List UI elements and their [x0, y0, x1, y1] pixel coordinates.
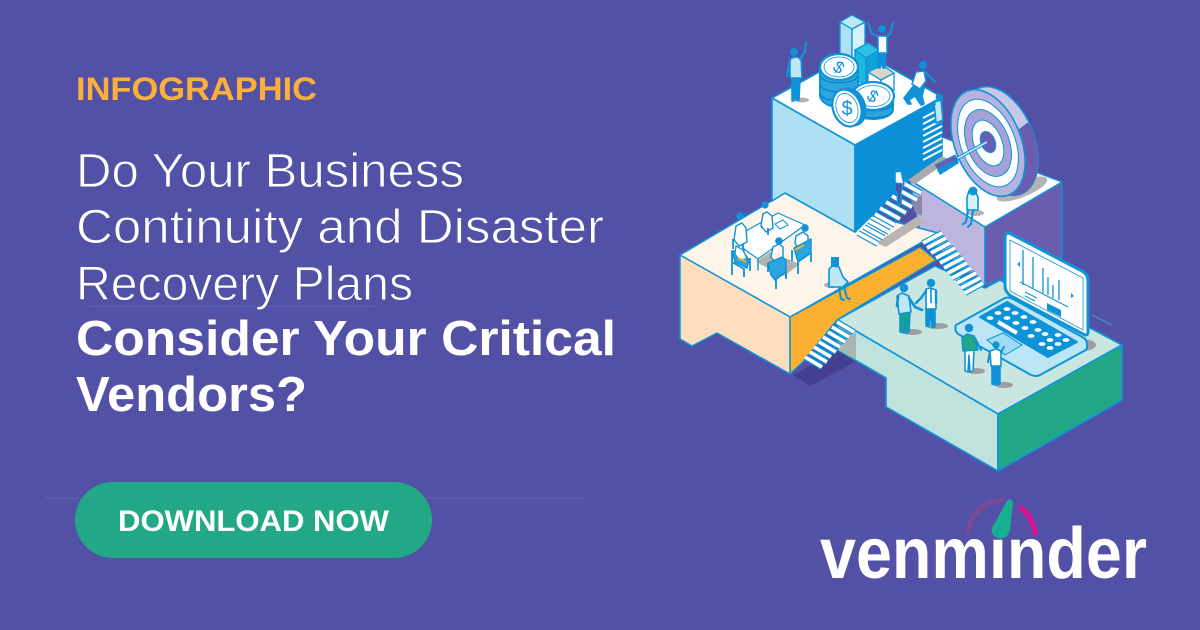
back person [761, 212, 773, 232]
person: cheering on pedestal [868, 23, 893, 68]
button: download now [75, 482, 432, 558]
block: purple [910, 137, 1062, 285]
laptop chart [1017, 250, 1074, 317]
stairs: orange to floor [805, 322, 854, 367]
block: blue cube [772, 50, 942, 232]
shadow under lower stairs [793, 350, 857, 386]
laptop screen [1005, 233, 1088, 335]
button: download now: DOWNLOAD NOW [118, 505, 390, 538]
heading: Continuity and Disaster [76, 201, 604, 254]
heading: Vendors? [76, 368, 307, 422]
label: INFOGRAPHIC: INFOGRAPHIC [76, 71, 317, 107]
front left person in chair [732, 251, 749, 268]
icon: coin stacks: $ [863, 86, 882, 107]
person: walking on stairs [889, 164, 908, 205]
icon: meeting table with people [732, 201, 811, 289]
block: cream [680, 193, 938, 374]
left person [734, 223, 747, 246]
icon: target with arrow [934, 86, 1048, 202]
heading: Recovery Plans [76, 258, 413, 311]
illustration: isometric blocks [680, 15, 1122, 471]
logo gauge [968, 499, 1035, 538]
icon: coin stacks [820, 54, 894, 131]
logo: venminder [820, 499, 1147, 594]
icon: coin stacks: $ [841, 98, 853, 120]
person: seated on purple block [963, 187, 984, 227]
block: green [837, 266, 1122, 471]
right person in chair [795, 232, 808, 253]
stairs: cube to cream [858, 183, 921, 244]
front person in chair [771, 244, 783, 265]
person: waving on cube [787, 42, 809, 102]
icon: laptop [955, 233, 1112, 376]
table top [737, 213, 805, 259]
icon: tall bars [840, 15, 894, 97]
person: white shirt [988, 341, 1013, 388]
person: seated on cream block [824, 257, 850, 300]
person: crouching at cube edge [904, 61, 935, 105]
stairs: cream to green [923, 233, 983, 293]
laptop base [955, 298, 1087, 376]
heading: Consider Your Critical [76, 312, 616, 366]
stairs: ladder on cube [923, 108, 942, 160]
people: handshake [897, 279, 948, 335]
person: green shirt [962, 324, 985, 374]
person: climbing ladder [926, 94, 943, 123]
logo wordmark: venmınder [820, 514, 1147, 594]
icon: coin stacks: $ [829, 57, 848, 78]
heading [76, 145, 616, 422]
heading: Do Your Business [76, 145, 464, 198]
